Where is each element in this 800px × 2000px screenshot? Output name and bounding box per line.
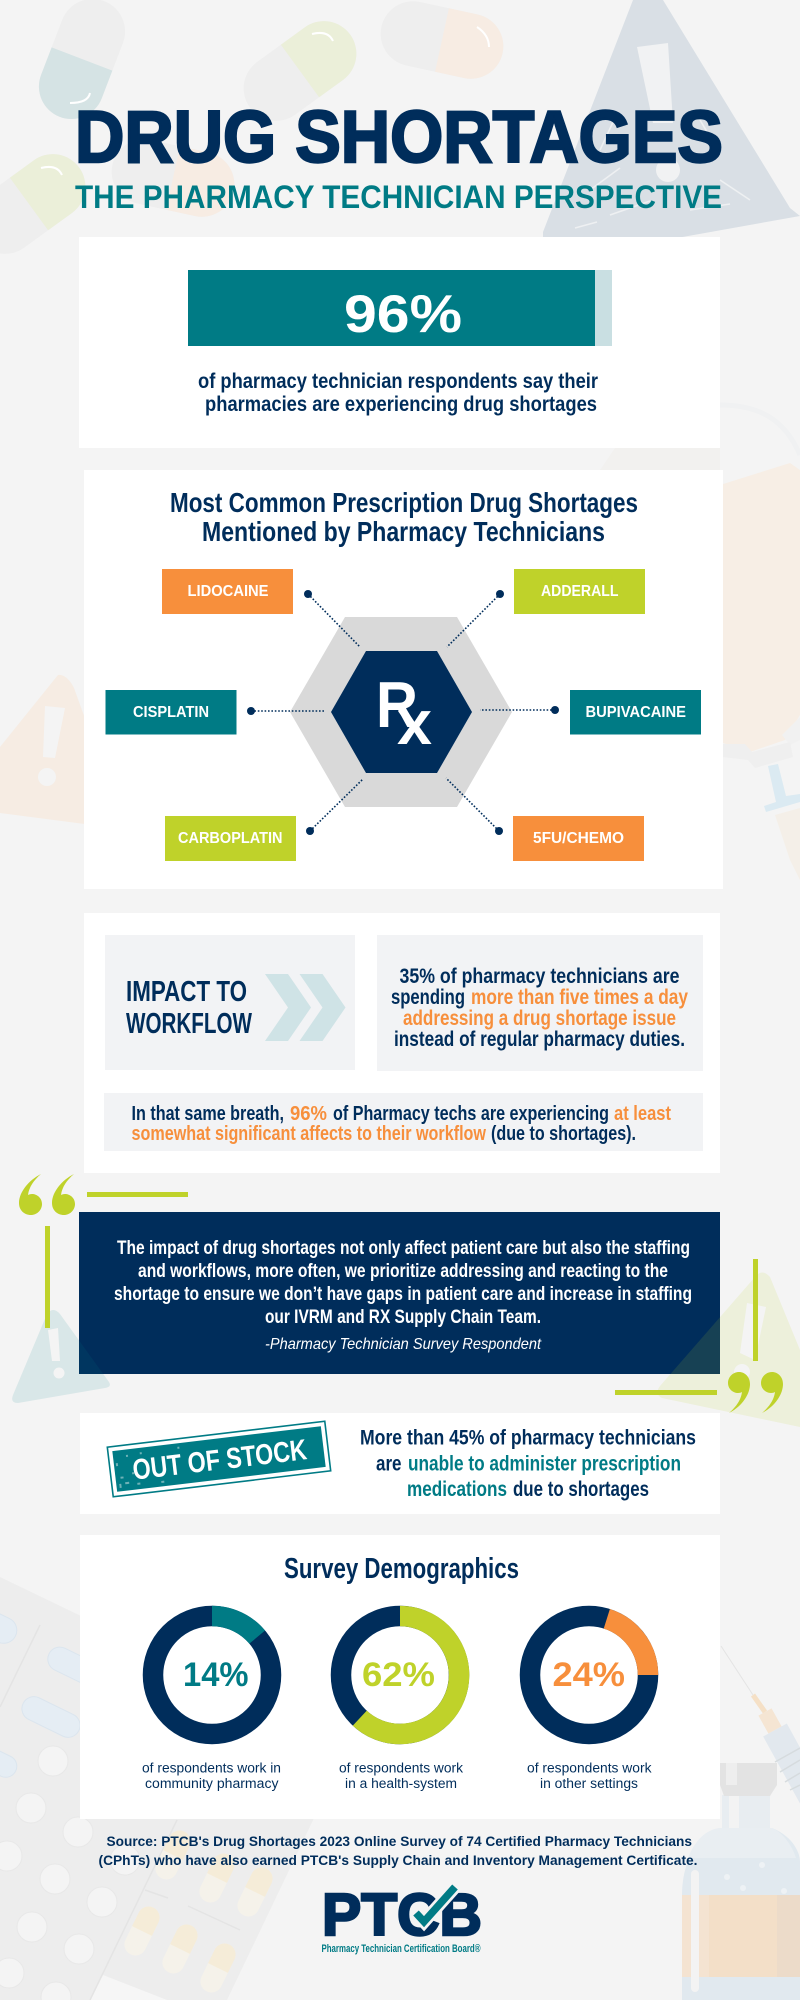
drug: cisplatin: CISPLATIN bbox=[133, 704, 209, 721]
donut caption: community pharmacy bbox=[142, 1760, 281, 1791]
panel: 96 percent statistic bbox=[79, 237, 720, 448]
donut chart: 62 percent: 62% bbox=[362, 1656, 435, 1694]
drug: 5FU chemo bbox=[513, 816, 644, 861]
drug: cisplatin bbox=[106, 690, 236, 734]
out of stock text: are bbox=[376, 1452, 402, 1476]
background: warning triangle top right bbox=[543, 0, 800, 262]
donut chart: 24 percent: 24% bbox=[552, 1656, 625, 1694]
donut chart: 62 percent bbox=[341, 1616, 459, 1734]
heading: Survey Demographics bbox=[284, 1553, 519, 1585]
donut caption: community pharmacy: of respondents work in bbox=[142, 1760, 281, 1776]
35 percent text box bbox=[377, 935, 703, 1071]
out of stock text: More than 45% of pharmacy technicians bbox=[360, 1426, 696, 1450]
drug: adderall: ADDERALL bbox=[541, 583, 618, 600]
35 percent text box: more than five times a day bbox=[471, 986, 688, 1009]
donut caption: health-system: of respondents work bbox=[339, 1760, 463, 1776]
impact heading box bbox=[105, 935, 355, 1070]
quote text: shortage to ensure we don’t have gaps in patient care and increase in staffing bbox=[114, 1284, 692, 1305]
source note bbox=[98, 1834, 697, 1868]
heading: Mentioned by Pharmacy Technicians bbox=[202, 516, 605, 547]
donut caption: other settings: of respondents work bbox=[527, 1760, 652, 1776]
35 percent text box: 35% of pharmacy technicians are bbox=[400, 965, 680, 988]
source note: Source: PTCB's Drug Shortages 2023 Online Survey of 74 Certified Pharmacy Technicians bbox=[106, 1834, 692, 1849]
donut chart: 14 percent: 14% bbox=[183, 1656, 248, 1694]
hexagon Rx icon: x bbox=[397, 689, 433, 758]
statistic description: of pharmacy technician respondents say their bbox=[198, 370, 598, 393]
heading bbox=[170, 487, 638, 547]
35 percent text box: addressing a drug shortage issue bbox=[403, 1007, 676, 1030]
hexagon Rx icon: R bbox=[376, 668, 418, 741]
donut caption: other settings bbox=[527, 1760, 652, 1791]
impact heading box: IMPACT TO bbox=[126, 976, 247, 1008]
96 percent workflow text box: of Pharmacy techs are experiencing bbox=[333, 1103, 609, 1125]
title: DRUG SHORTAGES bbox=[75, 97, 723, 178]
drug: bupivacaine bbox=[570, 690, 701, 734]
donut caption: community pharmacy: community pharmacy bbox=[145, 1776, 279, 1791]
drug: lidocaine bbox=[162, 569, 293, 614]
96 percent workflow text box: somewhat significant affects to their workflow bbox=[132, 1123, 486, 1145]
out of stock text: medications bbox=[407, 1478, 507, 1501]
background: medicine bottle bottom right bbox=[682, 1763, 800, 2000]
panel: survey demographics bbox=[80, 1535, 720, 1819]
96 percent workflow text box bbox=[104, 1093, 703, 1151]
icon: closing quote mark with rules bbox=[615, 1259, 783, 1413]
35 percent text box: instead of regular pharmacy duties. bbox=[394, 1028, 685, 1051]
donut caption: health-system bbox=[339, 1760, 463, 1791]
icon: out of stock stamp: OUT OF STOCK bbox=[131, 1434, 308, 1487]
quote attribution: -Pharmacy Technician Survey Respondent bbox=[265, 1336, 541, 1353]
background: blister pack with pills bottom left bbox=[0, 1577, 349, 2000]
impact heading box: WORKFLOW bbox=[126, 1008, 252, 1040]
quote text: The impact of drug shortages not only affect patient care but also the staffing bbox=[117, 1238, 690, 1259]
donut caption: other settings: in other settings bbox=[540, 1776, 638, 1791]
progress bar bbox=[188, 270, 612, 346]
donut caption: health-system: in a health-system bbox=[345, 1776, 457, 1791]
hexagon Rx icon bbox=[290, 617, 512, 807]
warning triangle left overlay bbox=[12, 1310, 110, 1403]
warning triangle right overlay bbox=[657, 1272, 800, 1427]
background: syringe bbox=[721, 1646, 800, 1830]
statistic description bbox=[198, 370, 598, 416]
96 percent workflow text box: (due to shortages). bbox=[491, 1123, 636, 1145]
heading: Most Common Prescription Drug Shortages bbox=[170, 487, 638, 518]
subtitle: THE PHARMACY TECHNICIAN PERSPECTIVE bbox=[75, 179, 722, 215]
panel: impact to workflow bbox=[84, 913, 720, 1173]
source note: (CPhTs) who have also earned PTCB's Supply Chain and Inventory Management Certificate. bbox=[98, 1853, 697, 1868]
background: capsule pills top bbox=[0, 0, 510, 267]
donut chart: 24 percent bbox=[530, 1616, 648, 1734]
quote text bbox=[114, 1238, 692, 1328]
quote text: our IVRM and RX Supply Chain Team. bbox=[265, 1307, 541, 1328]
statistic description: pharmacies are experiencing drug shortages bbox=[205, 393, 597, 416]
panel: most common shortages bbox=[84, 470, 723, 889]
drug: 5FU chemo: 5FU/CHEMO bbox=[533, 830, 624, 847]
progress bar: 96% bbox=[344, 285, 462, 344]
96 percent workflow text box: at least bbox=[614, 1103, 671, 1125]
out of stock text bbox=[360, 1426, 696, 1501]
panel: out of stock bbox=[80, 1413, 720, 1514]
icon: out of stock stamp bbox=[107, 1421, 331, 1497]
drug: carboplatin bbox=[165, 816, 296, 861]
background: IV bag right bbox=[600, 405, 800, 880]
icon: opening quote mark with rules bbox=[19, 1174, 188, 1328]
donut chart: 14 percent bbox=[153, 1616, 271, 1734]
out of stock text: due to shortages bbox=[513, 1478, 649, 1501]
35 percent text box: spending bbox=[391, 986, 465, 1009]
connector dots bbox=[247, 590, 559, 835]
drug: carboplatin: CARBOPLATIN bbox=[178, 830, 282, 847]
panel: respondent quote bbox=[12, 1212, 800, 1427]
background: warning triangle left bbox=[0, 675, 100, 826]
quote text: and workflows, more often, we prioritize addressing and reacting to the bbox=[138, 1261, 668, 1282]
logo: PTCB: Pharmacy Technician Certification Board® bbox=[322, 1943, 480, 1955]
drug: bupivacaine: BUPIVACAINE bbox=[586, 704, 686, 721]
96 percent workflow text box: In that same breath, bbox=[132, 1103, 284, 1125]
96 percent workflow text box: 96% bbox=[290, 1103, 327, 1125]
out of stock text: unable to administer prescription bbox=[408, 1452, 681, 1476]
connector lines bbox=[251, 594, 555, 831]
logo: PTCB: PTCB bbox=[322, 1882, 482, 1948]
drug: adderall bbox=[514, 569, 645, 614]
drug: lidocaine: LIDOCAINE bbox=[188, 583, 268, 600]
